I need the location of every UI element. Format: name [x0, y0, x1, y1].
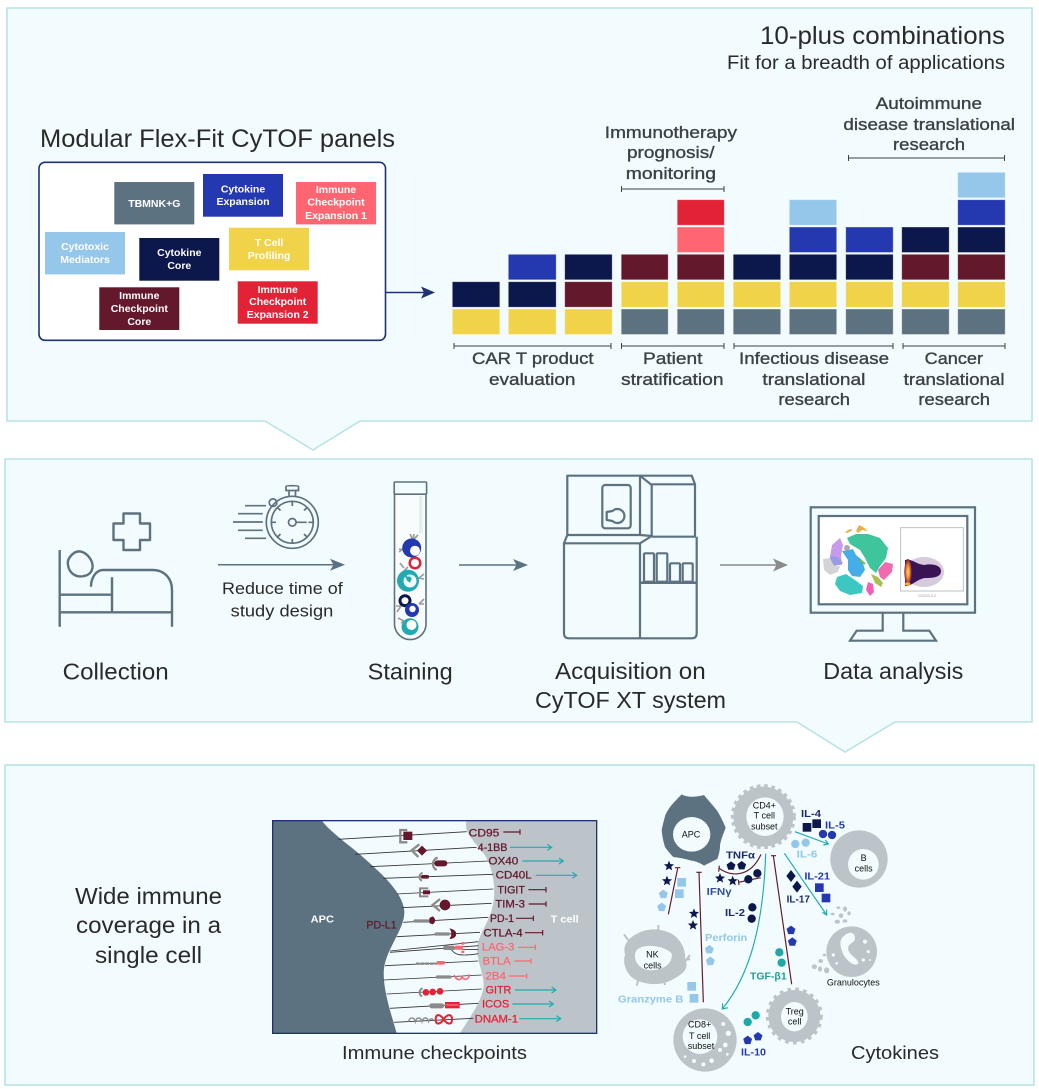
- cell: Treg cell: Treg: [786, 1007, 804, 1017]
- receptor labels: TIM-3: [495, 899, 525, 911]
- label: Autoimmune disease translational research: disease translational: [843, 115, 1015, 134]
- label: Acquisition on CyTOF XT system: Acquisition on: [555, 658, 706, 684]
- receptor labels: CTLA-4: [483, 927, 523, 939]
- label: Infectious disease translational research: Infectious disease: [739, 349, 889, 368]
- label: Immunotherapy prognosis/monitoring: prognosis/: [627, 143, 715, 162]
- receptor labels: CD40L: [496, 870, 532, 882]
- tile: T Cell Profiling: Profiling: [248, 250, 290, 262]
- cell: CD4+ T cell subset: T cell: [754, 811, 775, 821]
- tile: Immune Checkpoint Core: Immune: [119, 290, 160, 302]
- T cell membrane: [460, 821, 597, 1033]
- cell: granulocytes: Granulocytes: [827, 977, 880, 987]
- cell: CD8+ T cell subset: CD8+: [688, 1020, 711, 1030]
- cytokine labels: IFNγ: [707, 887, 732, 898]
- tile: Cytokine Expansion: Cytokine: [221, 184, 265, 196]
- cell: CD4+ T cell subset: subset: [751, 821, 778, 831]
- label: Autoimmune disease translational research: [843, 94, 1015, 154]
- tile: Immune Checkpoint Expansion 2: Immune: [258, 284, 298, 296]
- tile: T Cell Profiling: [229, 228, 309, 270]
- cytokine labels: IL-21: [804, 872, 831, 883]
- receptor labels: TIGIT: [497, 885, 525, 897]
- receptor labels: ICOS: [482, 999, 509, 1011]
- signalling lines: [668, 832, 828, 1009]
- cytokine labels: IL-4: [801, 809, 822, 820]
- label: Patient stratification: stratification: [621, 370, 724, 389]
- tile: Cytotoxic Mediators: [45, 232, 125, 274]
- cell: CD8+ T cell subset: T cell: [689, 1031, 710, 1041]
- density plot: [901, 528, 963, 598]
- label: CAR T product evaluation: [472, 349, 594, 389]
- tile: Cytotoxic Mediators: Mediators: [60, 254, 110, 266]
- cell: granulocytes: [812, 906, 880, 987]
- cytokine labels: [618, 809, 846, 1058]
- tile: T Cell Profiling: T Cell: [255, 237, 283, 249]
- membrane connecting lines: [338, 832, 493, 1022]
- APC membrane: [273, 821, 404, 1033]
- cell: CD4+ T cell subset: [732, 786, 794, 848]
- cytokine labels: IL-2: [725, 908, 745, 919]
- receptor labels: PD-L1: [366, 920, 397, 932]
- stacked panel chart: [452, 172, 1005, 334]
- label: Infectious disease translational research: translational: [762, 370, 865, 389]
- label: Staining: Staining: [368, 658, 453, 684]
- chart: immune checkpoints: [273, 821, 597, 1033]
- arrow: acquisition to data analysis: [720, 558, 788, 572]
- label: Immunotherapy prognosis/monitoring: monitoring: [626, 164, 716, 183]
- cytokine labels: IL-5: [825, 821, 846, 832]
- receptor and ligand glyphs: [400, 830, 469, 1024]
- cell: B cells: B: [861, 853, 867, 863]
- tile: Immune Checkpoint Expansion 1: Expansion 1: [305, 210, 367, 222]
- arrow: panels to stacks: [386, 286, 435, 298]
- cell: CD8+ T cell subset: subset: [688, 1041, 715, 1051]
- tile: TBMNK+G: TBMNK+G: [128, 198, 180, 210]
- chart: cytokine network: [618, 786, 888, 1072]
- label: Acquisition on CyTOF XT system: [535, 658, 726, 713]
- heading: Wide immune coverage in a single cell: coverage in a: [76, 912, 221, 938]
- tile: Immune Checkpoint Expansion 1: Checkpoint: [307, 196, 365, 208]
- tile: Immune Checkpoint Expansion 2: Expansion 2: [247, 309, 309, 321]
- label: Immunotherapy prognosis/monitoring: Immunotherapy: [605, 123, 738, 142]
- receptor labels: [366, 827, 532, 1025]
- tile: Cytotoxic Mediators: Cytotoxic: [61, 241, 109, 253]
- cytokine symbols: [657, 819, 836, 1044]
- icon: stopwatch with speed lines: [233, 486, 318, 548]
- tile: Immune Checkpoint Core: [99, 287, 179, 330]
- label: Cancer translational research: [904, 349, 1004, 409]
- density plot: CD3CD-0.2: [918, 594, 936, 598]
- label: Patient stratification: [621, 349, 724, 389]
- tile: Cytokine Expansion: [203, 174, 283, 217]
- inhibition bars: [503, 829, 546, 979]
- tile: Immune Checkpoint Expansion 1: Immune: [316, 184, 356, 196]
- tSNE plot: [823, 525, 893, 596]
- cell: APC: [662, 794, 726, 866]
- label: Infectious disease translational research: [739, 349, 889, 409]
- tile: Immune Checkpoint Core: Core: [127, 316, 151, 328]
- cytokine labels: TNFα: [726, 851, 755, 862]
- heading: Modular Flex-Fit CyTOF panels: Modular Flex-Fit CyTOF panels: [40, 125, 395, 153]
- cell: B cells: [830, 830, 888, 888]
- label: CAR T product evaluation: evaluation: [489, 370, 576, 389]
- cell: Treg cell: cell: [788, 1017, 801, 1027]
- activation arrows: [510, 844, 577, 1022]
- tile: TBMNK+G: [114, 182, 194, 224]
- tile: Immune Checkpoint Core: Checkpoint: [111, 303, 168, 315]
- label: T cell: T cell: [551, 915, 579, 926]
- cell: NK cells: [624, 925, 690, 986]
- brackets: [454, 155, 1005, 349]
- receptor labels: CD95: [469, 827, 499, 839]
- cell: NK cells: NK: [646, 950, 659, 960]
- label: Collection: Collection: [63, 658, 169, 684]
- arrow: reduce time: [218, 559, 345, 571]
- label: Autoimmune disease translational research: Autoimmune: [876, 94, 982, 113]
- icon: patient in bed with medical cross: [60, 514, 172, 627]
- icon: test tube with stained cells: [394, 482, 427, 640]
- receptor labels: OX40: [488, 856, 518, 868]
- cytokine labels: Granzyme B: [618, 994, 683, 1005]
- label: Cancer translational research: research: [918, 390, 990, 409]
- receptor labels: 4-1BB: [478, 842, 507, 854]
- cell: Treg cell: [767, 989, 821, 1043]
- cell: CD8+ T cell subset: [673, 1008, 737, 1072]
- tile: Cytokine Core: Core: [167, 260, 191, 272]
- heading: Wide immune coverage in a single cell: [75, 883, 222, 968]
- tile: Cytokine Core: Cytokine: [157, 247, 202, 259]
- panel: wide immune coverage: [5, 765, 1034, 1085]
- tile: Cytokine Expansion: Expansion: [216, 196, 270, 208]
- cytokine labels: IL-10: [741, 1047, 766, 1058]
- cytokine labels: Perforin: [705, 933, 747, 944]
- receptor labels: LAG-3: [482, 942, 514, 954]
- tile: Immune Checkpoint Expansion 2: Checkpoint: [249, 296, 307, 308]
- label: APC: APC: [311, 915, 334, 926]
- label: Immune checkpoints: Immune checkpoints: [342, 1042, 527, 1063]
- label: Acquisition on CyTOF XT system: CyTOF XT system: [535, 687, 726, 713]
- arrow: staining to acquisition: [459, 559, 528, 571]
- cytokine labels: IL-6: [797, 850, 818, 861]
- cytokine labels: TGF-β1: [750, 971, 787, 982]
- label: Reduce time of study design: study design: [231, 602, 333, 621]
- label: Cancer translational research: translational: [904, 370, 1004, 389]
- label: Cytokines: Cytokines: [851, 1042, 939, 1063]
- panel: workflow: [5, 459, 1032, 752]
- receptor labels: DNAM-1: [475, 1013, 518, 1025]
- receptor labels: GITR: [486, 984, 511, 996]
- receptor labels: 2B4: [485, 971, 506, 983]
- cell: APC: APC: [682, 830, 701, 840]
- cell: B cells: cells: [855, 864, 873, 874]
- icon: CyTOF XT instrument: [564, 476, 697, 638]
- cell: CD4+ T cell subset: CD4+: [753, 801, 776, 811]
- subheading: breadth of applications: Fit for a breadth of applications: [727, 53, 1005, 74]
- label: Autoimmune disease translational research: research: [893, 135, 965, 154]
- panel: modular panels and combinations: [7, 8, 1032, 450]
- label: Reduce time of study design: Reduce time of: [222, 579, 343, 598]
- cell: NK cells: cells: [644, 961, 662, 971]
- panel tile box: [39, 162, 386, 340]
- label: Immunotherapy prognosis/monitoring: [605, 123, 738, 183]
- heading: Wide immune coverage in a single cell: Wide immune: [75, 883, 222, 909]
- tile: Immune Checkpoint Expansion 1: [296, 182, 376, 224]
- label: CAR T product evaluation: CAR T product: [472, 349, 594, 368]
- label: Patient stratification: Patient: [643, 349, 703, 368]
- heading: Wide immune coverage in a single cell: single cell: [95, 942, 202, 968]
- label: Infectious disease translational research: research: [778, 390, 850, 409]
- label: Reduce time of study design: [222, 579, 343, 621]
- label: Cancer translational research: Cancer: [925, 349, 983, 368]
- cytokine labels: IL-17: [787, 895, 810, 906]
- receptor labels: BTLA: [483, 956, 511, 968]
- icon: monitor with data plots: [811, 507, 975, 641]
- receptor labels: PD-1: [490, 913, 514, 925]
- tile: Cytokine Core: [139, 238, 219, 281]
- tile: Immune Checkpoint Expansion 2: [238, 281, 318, 324]
- heading: 10-plus combinations: 10-plus combinations: [760, 22, 1005, 50]
- label: Data analysis: Data analysis: [823, 658, 963, 684]
